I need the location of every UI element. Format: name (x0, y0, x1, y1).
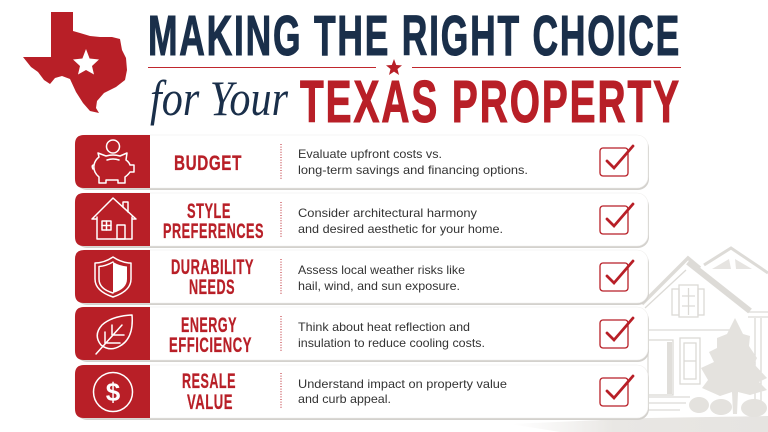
label: durability needs: NEEDS (189, 275, 235, 299)
label: energy efficiency (169, 313, 252, 357)
description: style preferences: and desired aesthetic for your home. (298, 223, 503, 236)
label: energy efficiency: ENERGY (181, 313, 237, 337)
icon: piggy bank (92, 140, 134, 183)
icon: checkbox (600, 261, 633, 291)
description: resale value (298, 378, 507, 406)
description: durability needs: Assess local weather risks like (298, 264, 465, 277)
icon: leaf (96, 315, 132, 354)
description: style preferences: Consider architectural harmony (298, 207, 477, 220)
description: energy efficiency: insulation to reduce cooling costs. (298, 337, 485, 350)
subtitle script: for Your: for Your (150, 70, 288, 126)
description: durability needs (298, 264, 465, 293)
icon: shield (95, 257, 131, 297)
divider with star (148, 59, 681, 75)
icon: checkbox (600, 146, 633, 176)
description: durability needs: hail, wind, and sun exposure. (298, 280, 460, 293)
label: energy efficiency: EFFICIENCY (169, 333, 252, 357)
panel: resale value (75, 365, 649, 420)
label: durability needs: DURABILITY (171, 255, 254, 279)
label: durability needs (171, 255, 254, 299)
background house illustration (510, 248, 768, 432)
panel: energy efficiency (75, 307, 649, 362)
icon: checkbox (600, 318, 633, 348)
icon: Texas map with star (23, 12, 127, 113)
label: resale value: VALUE (187, 390, 233, 414)
label: resale value: RESALE (182, 369, 236, 393)
description: resale value: and curb appeal. (298, 393, 391, 406)
label: style preferences (163, 199, 264, 243)
icon: house (92, 198, 136, 239)
panel: budget (75, 135, 649, 190)
icon: checkbox (600, 376, 633, 406)
description: resale value: Understand impact on property value (298, 378, 507, 391)
panel: durability needs (75, 250, 649, 305)
panel: style preferences (75, 193, 649, 248)
label: style preferences: STYLE (187, 199, 231, 223)
description: budget (298, 148, 528, 177)
description: style preferences (298, 207, 503, 236)
icon: checkbox (600, 204, 633, 234)
description: budget: Evaluate upfront costs vs. (298, 148, 442, 161)
icon: dollar coin (94, 372, 132, 412)
label: resale value (182, 369, 236, 414)
label: style preferences: PREFERENCES (163, 219, 264, 243)
description: budget: long-term savings and financing options. (298, 164, 528, 177)
description: energy efficiency (298, 321, 485, 350)
label: budget: BUDGET (174, 151, 242, 175)
icon: dollar coin: $ (106, 377, 121, 407)
description: energy efficiency: Think about heat reflection and (298, 321, 470, 334)
